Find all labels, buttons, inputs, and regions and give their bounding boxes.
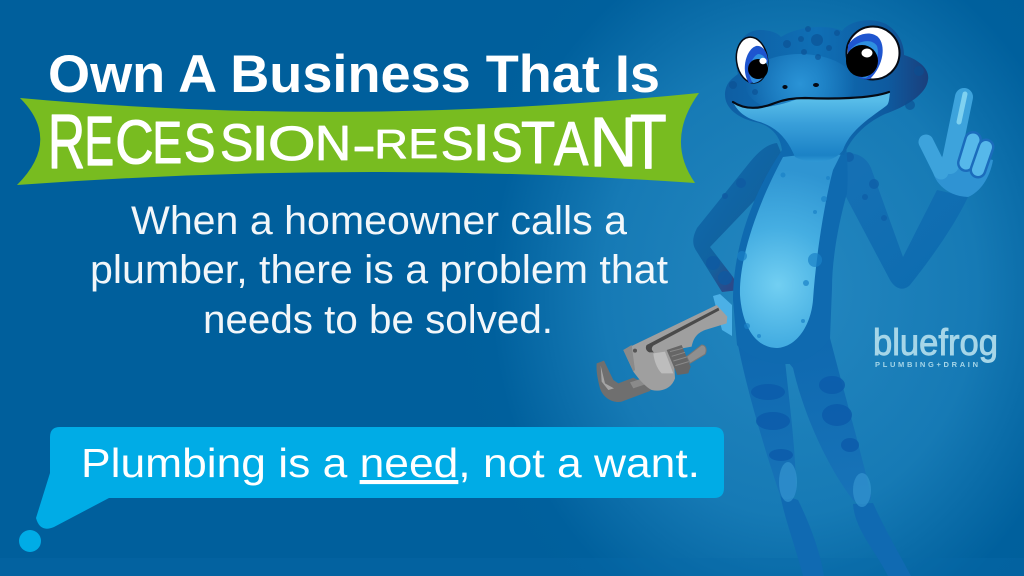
body text: plumber, there is a problem that	[90, 248, 668, 292]
callout text: Plumbing is a need, not a want.	[81, 440, 700, 486]
pipe wrench icon	[596, 305, 727, 402]
frog mouth	[733, 92, 889, 108]
banner text: Recession-Resistant: T	[521, 110, 555, 176]
banner text: Recession-Resistant: E	[408, 121, 438, 168]
body text: needs to be solved.	[203, 298, 553, 342]
banner text: Recession-Resistant: I	[472, 115, 490, 171]
body text	[90, 199, 668, 342]
banner text: Recession-Resistant: R	[48, 99, 85, 184]
frog belly	[740, 150, 843, 348]
banner text: Recession-Resistant: A	[554, 110, 588, 179]
frog right arm and hand	[843, 94, 993, 289]
banner text: Recession-Resistant: S	[491, 113, 523, 173]
banner text: Recession-Resistant: -	[352, 118, 376, 174]
banner text: Recession-Resistant: S	[184, 113, 216, 173]
banner text: Recession-Resistant: S	[220, 114, 253, 172]
belly spots	[737, 172, 830, 338]
frog head	[725, 20, 928, 155]
frog left arm	[693, 143, 782, 292]
body text: When a homeowner calls a	[131, 199, 628, 243]
banner text: Recession-Resistant: E	[84, 103, 114, 180]
banner text: Recession-Resistant: E	[152, 110, 182, 177]
frog chin and neck	[733, 92, 890, 162]
frog mascot	[693, 20, 993, 576]
banner text: Recession-Resistant: R	[374, 122, 408, 167]
banner text: Recession-Resistant: T	[630, 99, 667, 185]
frog nostrils	[782, 83, 819, 89]
frog leg stripes	[751, 376, 859, 461]
banner text: Recession-Resistant: N	[315, 115, 351, 171]
frog right eye	[846, 26, 900, 80]
banner text: Recession-Resistant: S	[441, 119, 474, 170]
frog torso	[733, 130, 848, 364]
heading: Own A Business That Is: Own A Business That Is	[48, 45, 660, 104]
logo: bluefrog plumbing + drain: PLUMBING+DRAIN	[875, 360, 978, 369]
bubble dot	[19, 530, 41, 552]
frog knees	[779, 462, 871, 507]
banner text: Recession-Resistant: N	[590, 104, 637, 181]
frog lower legs	[780, 494, 911, 576]
frog left eye	[733, 35, 771, 85]
frog hidden hand at hip	[713, 294, 732, 336]
head nose glow	[745, 54, 855, 114]
banner text: Recession-Resistant	[48, 99, 667, 185]
logo: bluefrog plumbing + drain: bluefrog	[873, 322, 998, 363]
banner text: Recession-Resistant: I	[251, 116, 269, 171]
banner text: Recession-Resistant: O	[268, 116, 316, 170]
banner text: Recession-Resistant: C	[115, 109, 154, 177]
frog upper legs	[738, 338, 871, 504]
head spots	[729, 26, 924, 110]
callout speech bubble	[19, 427, 724, 552]
green ribbon banner	[17, 93, 699, 185]
